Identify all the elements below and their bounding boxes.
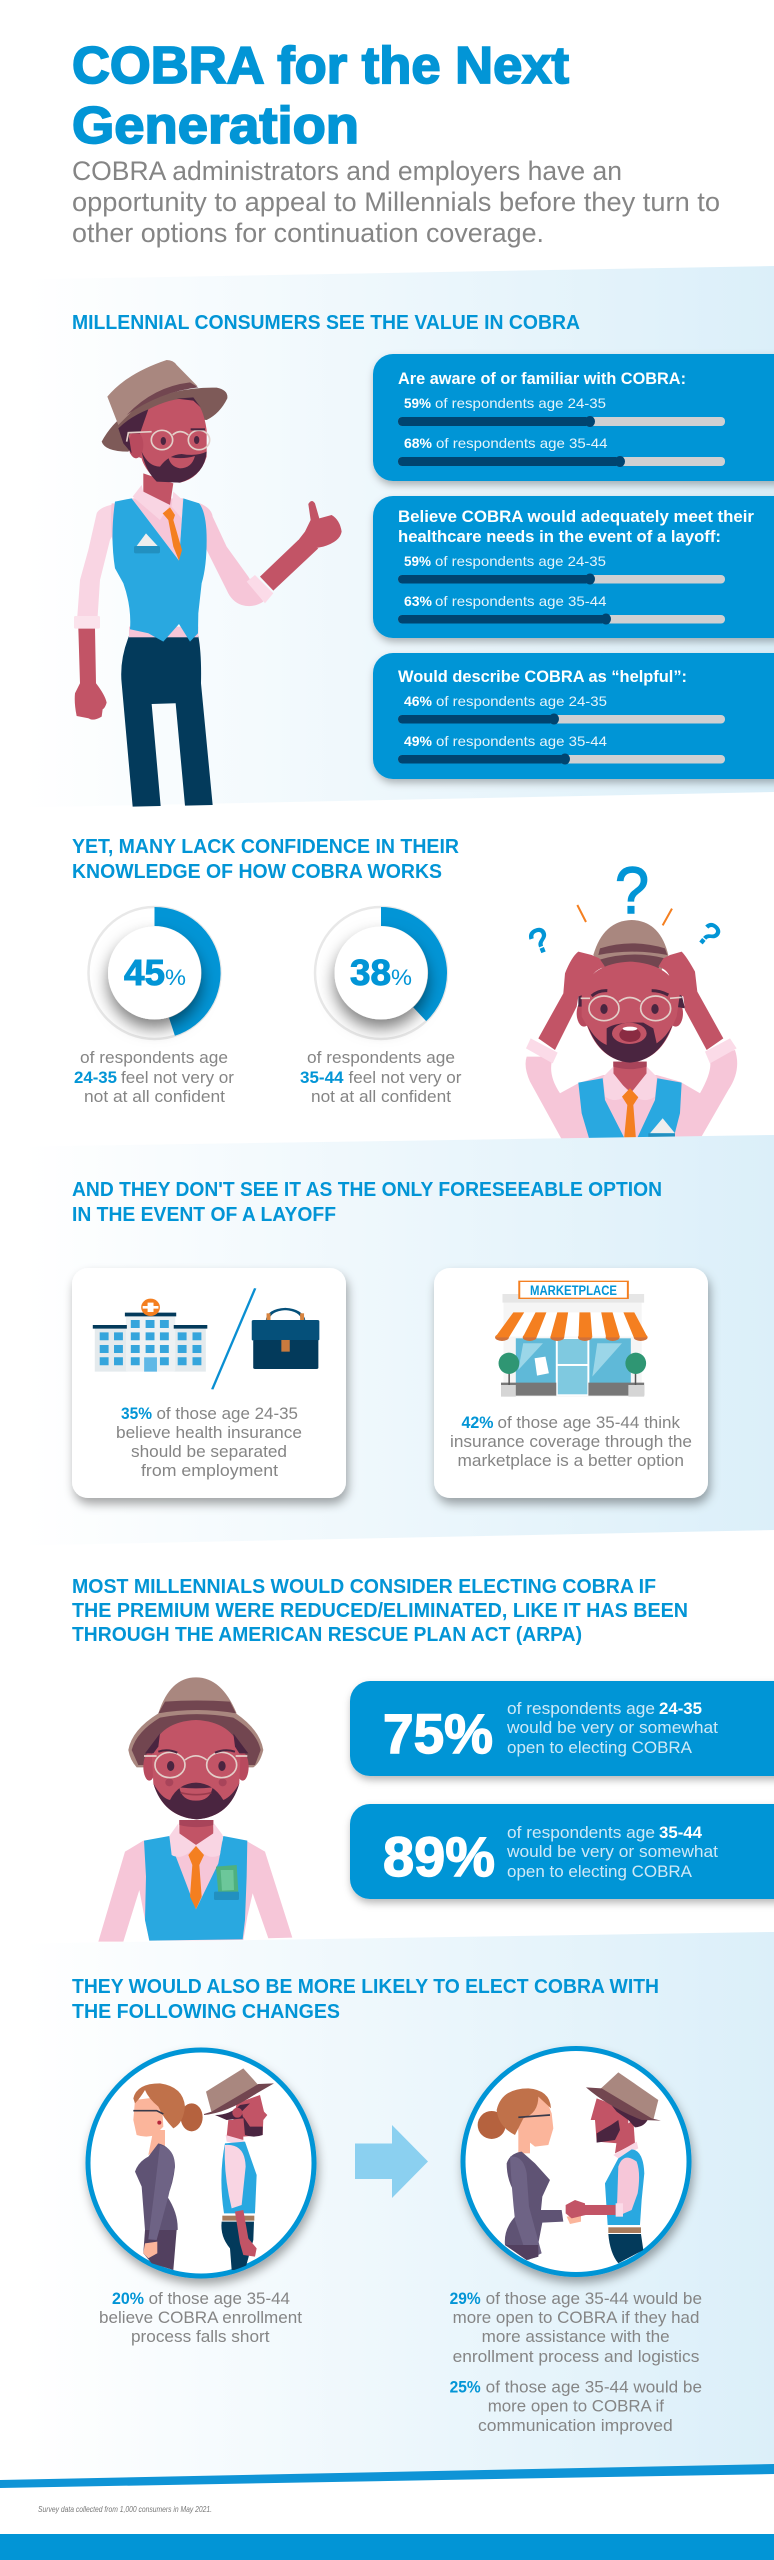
donut: 38 percent: %	[391, 965, 412, 990]
panel: helpful: of respondents age 24-35	[436, 693, 607, 709]
icon: question marks: ?	[615, 853, 649, 927]
man	[204, 2068, 274, 2270]
text: 25 percent	[450, 2378, 702, 2435]
text: 42 percent: of those age 35-44 think	[498, 1413, 680, 1432]
heading: premium reduced: THROUGH THE AMERICAN RESCUE PLAN ACT (ARPA)	[72, 1624, 582, 1646]
panel: 89 percent: would be very or somewhat	[506, 1842, 718, 1861]
text: 20 percent	[99, 2289, 302, 2346]
panel: helpful: 49%	[404, 733, 433, 749]
label: 38 percent: feel not very or	[348, 1068, 462, 1087]
bar: 59% age 24-35	[398, 416, 725, 427]
circle: coworkers shaking hands	[463, 2048, 689, 2274]
text: 42 percent: 42%	[462, 1413, 494, 1432]
label: 38 percent: not at all confident	[311, 1087, 451, 1106]
text: 29 percent: 29%	[450, 2289, 481, 2308]
heading: not the only option: AND THEY DON'T SEE IT AS THE ONLY FORESEEABLE OPTION	[72, 1179, 662, 1201]
intro text	[72, 156, 720, 248]
panel: 75 percent: 75%	[383, 1702, 493, 1765]
bar: 59% age 24-35	[398, 574, 725, 584]
panel: 89 percent: 35-44	[659, 1823, 703, 1842]
bar: 68% age 35-44	[398, 456, 725, 467]
panel: meets healthcare needs: healthcare needs in the event of a layoff:	[398, 528, 721, 546]
bar: 46% age 24-35	[398, 714, 725, 724]
text: 20 percent: 20%	[112, 2289, 144, 2308]
text: 42 percent	[450, 1413, 692, 1470]
text: 42 percent: insurance coverage through the	[450, 1432, 692, 1451]
donut: 38 percent: 38	[350, 952, 391, 993]
woman	[133, 2083, 203, 2270]
panel: helpful	[373, 653, 774, 779]
heading: likely to elect: THE FOLLOWING CHANGES	[72, 2001, 340, 2023]
text: 35 percent: of those age 24-35	[156, 1404, 298, 1423]
panel: 75 percent: of respondents age	[507, 1699, 655, 1718]
text: 25 percent: of those age 35-44 would be	[486, 2378, 702, 2397]
label: 45 percent: of respondents age	[80, 1048, 228, 1067]
text: 25 percent: communication improved	[478, 2416, 673, 2435]
background band: section 1	[0, 266, 774, 808]
heading: value of COBRA: MILLENNIAL CONSUMERS SEE THE VALUE IN COBRA	[72, 312, 580, 334]
title: Generation	[72, 97, 359, 155]
intro text: COBRA administrators and employers have an	[72, 156, 622, 186]
panel: meets healthcare needs: Believe COBRA would adequately meet their	[398, 508, 755, 526]
card: separated from employment	[72, 1268, 346, 1498]
panel: helpful: Would describe COBRA as “helpful”:	[398, 668, 687, 686]
panel: 89 percent: of respondents age	[507, 1823, 655, 1842]
panel: 75 percent: open to electing COBRA	[507, 1738, 693, 1757]
heading: not the only option: IN THE EVENT OF A LAYOFF	[72, 1204, 336, 1226]
background band: section 3	[0, 1135, 774, 1546]
intro text: opportunity to appeal to Millennials before they turn to	[72, 187, 720, 217]
heading: lack of confidence	[72, 836, 460, 883]
panel: meets healthcare needs: 63%	[404, 593, 433, 609]
panel: 89 percent	[350, 1804, 774, 1899]
panel: 89 percent: 89%	[383, 1825, 495, 1888]
label: 45 percent	[74, 1048, 234, 1106]
panel: 75 percent: 24-35	[659, 1699, 702, 1718]
icon: question marks: ?	[524, 920, 556, 962]
background band: section 5	[0, 1932, 774, 2482]
text: 29 percent: enrollment process and logistics	[453, 2347, 699, 2366]
donut: 45 percent	[88, 907, 221, 1039]
text: 35 percent: believe health insurance	[116, 1423, 302, 1442]
heading: premium reduced	[72, 1576, 688, 1646]
panel: helpful: of respondents age 35-44	[436, 733, 607, 749]
footer bar	[0, 2534, 774, 2560]
title	[72, 37, 569, 155]
bar: 49% age 35-44	[398, 754, 725, 764]
text: 35 percent	[116, 1404, 302, 1480]
text: 35 percent: should be separated	[131, 1442, 287, 1461]
panel: 89 percent: open to electing COBRA	[507, 1862, 693, 1881]
footnote: Survey data collected from 1,000 consumers in May 2021.	[38, 2505, 212, 2514]
text: 20 percent: believe COBRA enrollment	[99, 2308, 302, 2327]
panel: meets healthcare needs: 59%	[404, 553, 432, 569]
text: 29 percent	[450, 2289, 702, 2366]
panel: 75 percent	[350, 1681, 774, 1776]
text: 35 percent: 35%	[121, 1404, 152, 1423]
heading: not the only option	[72, 1179, 662, 1226]
icon: question marks	[524, 853, 727, 962]
label: 45 percent: feel not very or	[121, 1068, 234, 1087]
panel: aware of COBRA: Are aware of or familiar with COBRA:	[398, 370, 686, 388]
text: 25 percent: 25%	[450, 2378, 481, 2397]
card: marketplace	[434, 1268, 708, 1498]
text: 29 percent: more open to COBRA if they had	[453, 2308, 699, 2327]
panel: aware of COBRA: of respondents age 35-44	[436, 435, 608, 451]
label: 38 percent	[300, 1048, 462, 1106]
text: 20 percent: process falls short	[131, 2327, 270, 2346]
label: 38 percent: of respondents age	[307, 1048, 455, 1067]
panel: 75 percent: would be very or somewhat	[506, 1718, 718, 1737]
title: COBRA for the Next	[72, 37, 569, 95]
text: 29 percent: of those age 35-44 would be	[486, 2289, 702, 2308]
heading: likely to elect	[72, 1976, 659, 2023]
donut: 45 percent: %	[165, 965, 186, 990]
illustration: man with money in pocket	[98, 1677, 292, 1942]
panel: aware of COBRA: 68%	[404, 435, 433, 451]
illustration: man giving thumbs up	[74, 360, 342, 807]
donut: 38 percent	[315, 907, 447, 1039]
label: 45 percent: 24-35	[74, 1068, 117, 1087]
arrow	[355, 2125, 428, 2198]
icon: question marks: ?	[691, 915, 727, 954]
illustration: confused man holding head	[526, 905, 737, 1139]
heading: premium reduced: THE PREMIUM WERE REDUCED/ELIMINATED, LIKE IT HAS BEEN	[72, 1600, 688, 1622]
man	[566, 2072, 661, 2263]
intro text: other options for continuation coverage.	[72, 218, 544, 248]
text: 29 percent: more assistance with the	[482, 2327, 670, 2346]
label: 38 percent: 35-44	[300, 1068, 344, 1087]
bar: 63% age 35-44	[398, 614, 725, 624]
panel: aware of COBRA: 59%	[404, 395, 432, 411]
icon: hospital and briefcase	[93, 1288, 319, 1389]
heading: lack of confidence: KNOWLEDGE OF HOW COBRA WORKS	[72, 861, 442, 883]
woman	[478, 2088, 581, 2260]
text: 25 percent: more open to COBRA if	[488, 2396, 664, 2416]
heading: likely to elect: THEY WOULD ALSO BE MORE LIKELY TO ELECT COBRA WITH	[72, 1976, 659, 1998]
panel: meets healthcare needs: of respondents age 24-35	[435, 553, 606, 569]
footer stripe	[0, 2464, 774, 2488]
heading: premium reduced: MOST MILLENNIALS WOULD CONSIDER ELECTING COBRA IF	[72, 1576, 656, 1598]
label: 45 percent: not at all confident	[84, 1087, 225, 1106]
panel: helpful: 46%	[404, 693, 433, 709]
sign: marketplace: MARKETPLACE	[530, 1283, 617, 1298]
icon: marketplace storefront	[495, 1281, 648, 1397]
donut: 45 percent: 45	[124, 952, 165, 993]
panel: meets healthcare needs	[373, 496, 774, 638]
text: 20 percent: of those age 35-44	[149, 2289, 290, 2308]
panel: aware of COBRA: of respondents age 24-35	[435, 395, 606, 411]
panel: aware of COBRA	[373, 354, 774, 481]
text: 35 percent: from employment	[141, 1461, 278, 1480]
heading: lack of confidence: YET, MANY LACK CONFIDENCE IN THEIR	[72, 836, 460, 858]
panel: meets healthcare needs: of respondents age 35-44	[435, 593, 607, 609]
circle: coworkers back to back	[88, 2050, 314, 2276]
text: 42 percent: marketplace is a better option	[458, 1451, 684, 1470]
